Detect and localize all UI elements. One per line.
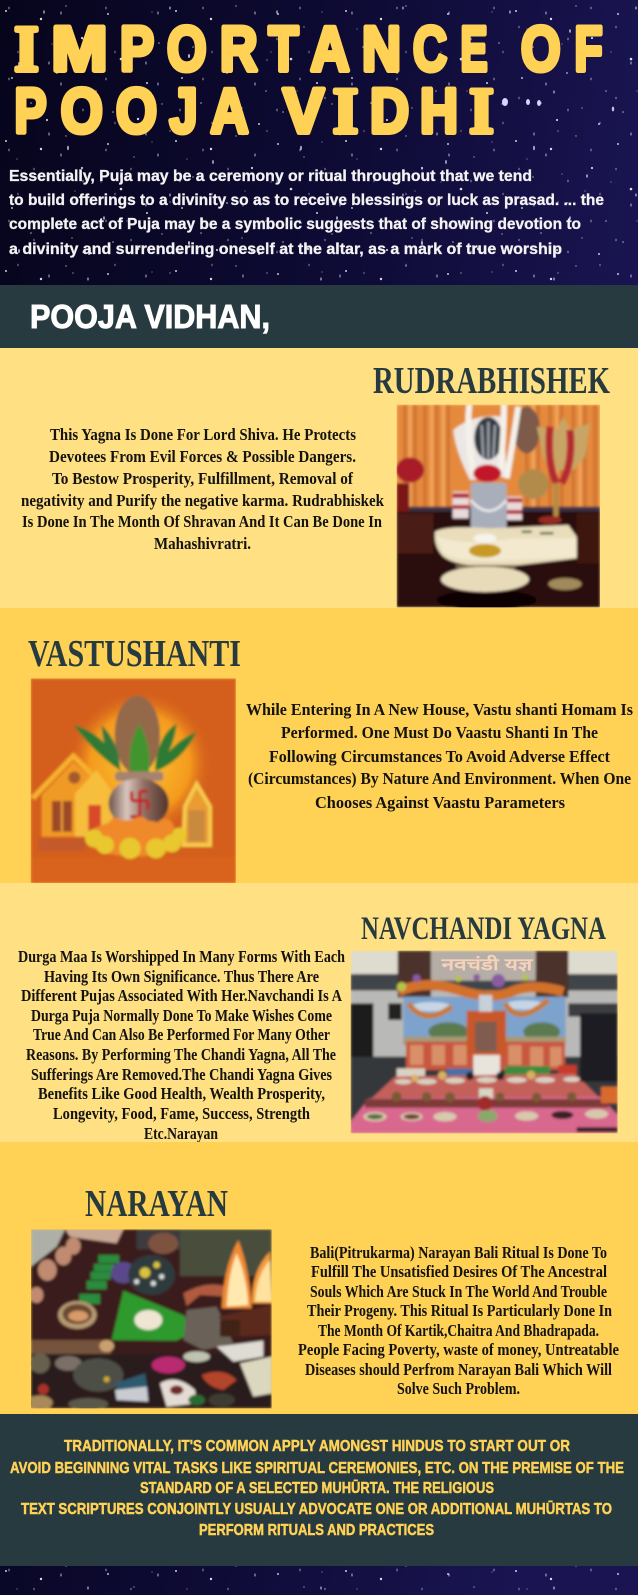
title: P bbox=[14, 76, 46, 146]
text: navchandi description: Sufferings Are Removed.The Chandi Yagna Gives bbox=[31, 1065, 332, 1084]
text: vastushanti description: Performed. One Must Do Vaastu Shanti In The bbox=[281, 723, 598, 742]
title: E bbox=[460, 14, 488, 84]
title: F bbox=[574, 14, 602, 84]
title: O bbox=[521, 14, 560, 84]
footer text bbox=[10, 1438, 624, 1539]
text: navchandi description: True And Can Also Be Performed For Many Other bbox=[33, 1025, 330, 1044]
text: navchandi description: Etc.Narayan bbox=[144, 1124, 218, 1143]
text: rudrabhishek description: negativity and Purify the negative karma. Rudrabhiskek bbox=[21, 491, 385, 510]
title: A bbox=[210, 76, 248, 146]
title: T bbox=[268, 14, 298, 84]
intro paragraph: Essentially, Puja may be a ceremony or ritual throughout that we tend bbox=[9, 168, 532, 185]
text: rudrabhishek description: To Bestow Prosperity, Fulfillment, Removal of bbox=[52, 469, 353, 488]
text: navchandi description bbox=[18, 947, 345, 1143]
image: navchandi altar: नवचंडी यज्ञ bbox=[440, 954, 534, 974]
text: vastushanti description: Following Circumstances To Avoid Adverse Effect bbox=[269, 747, 610, 766]
text: vastushanti description bbox=[246, 700, 634, 812]
text: rudrabhishek description: Is Done In The Month Of Shravan And It Can Be Done In bbox=[22, 512, 382, 531]
heading: narayan: NARAYAN bbox=[85, 1183, 228, 1225]
panel: navchandi yagna bbox=[0, 883, 638, 1143]
title: R bbox=[220, 14, 258, 84]
text: rudrabhishek description bbox=[21, 425, 385, 553]
title: N bbox=[362, 14, 401, 84]
text: navchandi description: Durga Puja Normally Done To Make Wishes Come bbox=[31, 1006, 332, 1025]
title: C bbox=[413, 14, 447, 84]
intro paragraph: complete act of Puja may be a symbolic suggests that of showing devotion to bbox=[9, 216, 581, 233]
title: I bbox=[333, 76, 358, 148]
text: vastushanti description: Chooses Against Vaastu Parameters bbox=[315, 793, 566, 812]
text: navchandi description: Durga Maa Is Worshipped In Many Forms With Each bbox=[18, 947, 345, 966]
title: A bbox=[310, 14, 350, 84]
intro paragraph bbox=[9, 168, 604, 258]
text: navchandi description: Benefits Like Good Health, Wealth Prosperity, bbox=[38, 1084, 325, 1103]
intro paragraph: to build offerings to a divinity so as to receive blessings or luck as prasad. ... the bbox=[9, 192, 604, 209]
section band: pooja vidhan bbox=[0, 285, 638, 348]
image: kalash and house bbox=[31, 678, 236, 883]
title bbox=[14, 14, 602, 148]
footer text: PERFORM RITUALS AND PRACTICES bbox=[199, 1522, 434, 1539]
title: V bbox=[283, 76, 324, 146]
title: I bbox=[470, 76, 494, 148]
text: rudrabhishek description: Mahashivratri. bbox=[154, 534, 251, 553]
title: O bbox=[61, 76, 103, 146]
title: J bbox=[170, 76, 198, 146]
title: I bbox=[14, 14, 38, 86]
title: O bbox=[167, 14, 206, 84]
panel: narayan bbox=[0, 1142, 638, 1414]
title: H bbox=[420, 76, 458, 146]
text: navchandi description: Different Pujas Associated With Her.Navchandi Is A bbox=[21, 986, 342, 1005]
text: narayan description bbox=[298, 1243, 619, 1398]
text: narayan description: Solve Such Problem. bbox=[397, 1379, 520, 1398]
band heading: POOJA VIDHAN, bbox=[30, 298, 270, 335]
title: O bbox=[116, 76, 157, 146]
title: P bbox=[120, 14, 154, 84]
panel: vastushanti bbox=[0, 608, 638, 883]
intro paragraph: a divinity and surrendering oneself at the altar, as a mark of true worship bbox=[9, 241, 562, 258]
text: navchandi description: Longevity, Food, Fame, Success, Strength bbox=[53, 1104, 310, 1123]
text: navchandi description: Having Its Own Significance. Thus There Are bbox=[44, 967, 319, 986]
text: rudrabhishek description: Devotees From Evil Forces & Possible Dangers. bbox=[49, 447, 356, 466]
image: navchandi altar bbox=[351, 951, 618, 1133]
footer text: TRADITIONALLY, IT'S COMMON APPLY AMONGST HINDUS TO START OUT OR bbox=[64, 1438, 570, 1455]
title: M bbox=[52, 14, 108, 84]
footer panel bbox=[0, 1414, 638, 1566]
title: D bbox=[370, 76, 409, 146]
image: shiva linga altar bbox=[396, 405, 600, 610]
image: narayan bali ritual bbox=[27, 1229, 272, 1410]
panel: rudrabhishek bbox=[0, 348, 638, 610]
text: rudrabhishek description: This Yagna Is Done For Lord Shiva. He Protects bbox=[50, 425, 357, 444]
text: navchandi description: Reasons. By Performing The Chandi Yagna, All The bbox=[26, 1045, 336, 1064]
heading: vastushanti: VASTUSHANTI bbox=[28, 633, 241, 675]
footer text: STANDARD OF A SELECTED MUHŪRTA. THE RELIGIOUS bbox=[140, 1480, 494, 1497]
text: vastushanti description: While Entering In A New House, Vastu shanti Homam Is bbox=[246, 700, 634, 719]
